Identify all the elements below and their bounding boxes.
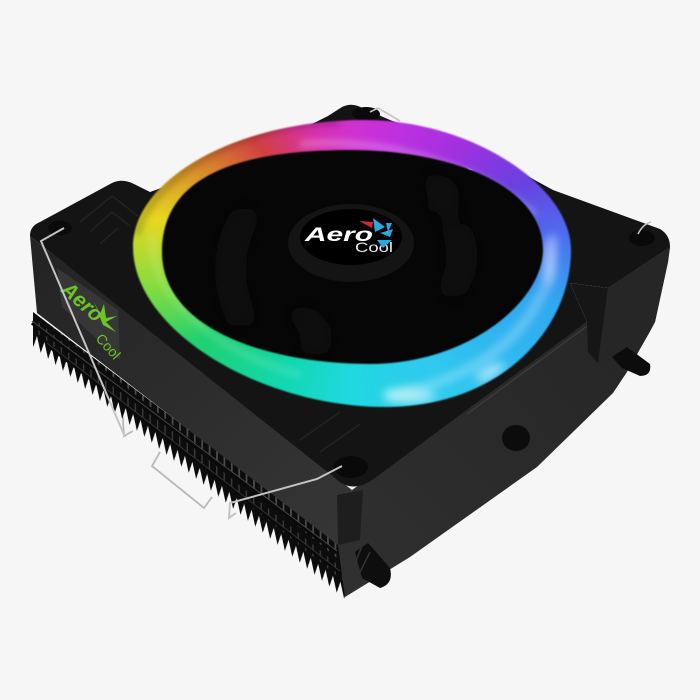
logo wordmark Aero: Aero bbox=[303, 225, 373, 246]
heatsink fins bbox=[32, 312, 345, 600]
RGB LED ring bbox=[132, 119, 572, 408]
top face embossed pattern bbox=[80, 196, 360, 452]
ring bright spots bbox=[384, 238, 554, 403]
green logo panel bbox=[56, 268, 124, 362]
retention clip: lower loop bbox=[122, 405, 212, 508]
screw: middle bbox=[502, 425, 530, 451]
green logo panel: Aero bbox=[56, 277, 108, 327]
fan blades bbox=[231, 178, 462, 352]
wire clips bbox=[41, 108, 651, 518]
left side face bbox=[30, 236, 352, 545]
logo fan mark bbox=[359, 218, 393, 248]
green logo panel: Cool bbox=[93, 330, 124, 362]
logo wordmark Cool: Cool bbox=[355, 239, 393, 255]
mounting hole: top right bbox=[629, 230, 655, 246]
fan hub bbox=[288, 204, 414, 282]
screw: right bbox=[612, 347, 650, 376]
right corner block bbox=[570, 247, 670, 363]
top face bbox=[30, 105, 670, 486]
mounting hole: front bbox=[334, 456, 368, 478]
corner pillar bbox=[337, 490, 363, 545]
fan recess bbox=[162, 150, 543, 364]
screw: bottom bbox=[354, 543, 391, 588]
mounting hole: top left bbox=[48, 221, 72, 235]
product photo: CPU cooler bbox=[30, 104, 670, 599]
top face ledge highlight bbox=[467, 326, 587, 414]
ring outer shading bbox=[136, 121, 340, 235]
ring inner highlight bbox=[153, 143, 553, 395]
mounting hole: top bbox=[352, 107, 380, 121]
right side face bbox=[338, 247, 670, 597]
hub logo bbox=[300, 209, 402, 265]
